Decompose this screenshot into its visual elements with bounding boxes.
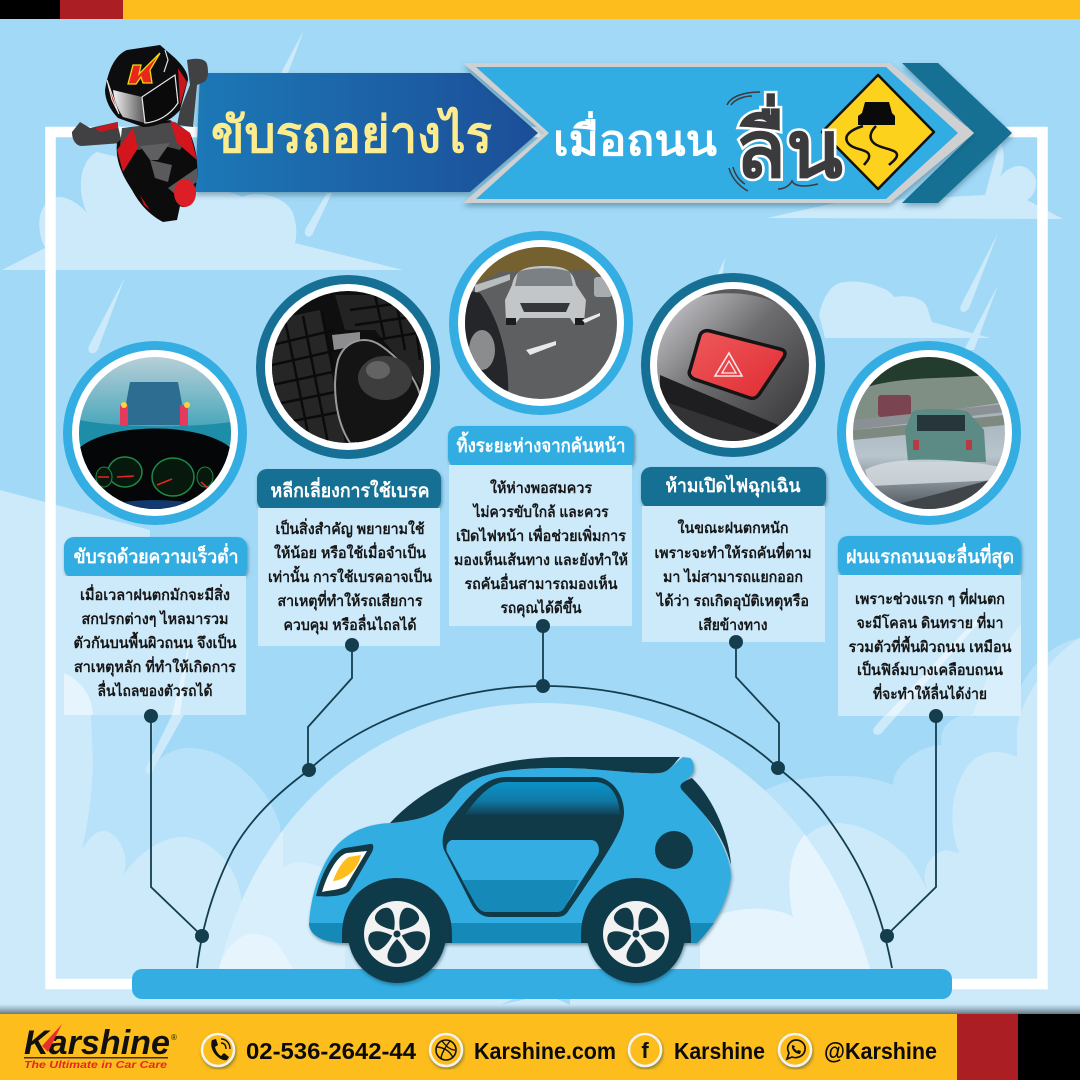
text block bbox=[838, 575, 1021, 735]
left arm bbox=[72, 122, 122, 146]
heading bbox=[448, 426, 634, 467]
rain streak lower left bbox=[146, 715, 184, 774]
helmet K logo bbox=[128, 53, 160, 84]
helmet bbox=[105, 45, 188, 127]
text block: มา ไม่สามารถแยกออก bbox=[663, 567, 803, 586]
text block: เพราะจะทำให้รถคันที่ตาม bbox=[654, 542, 812, 562]
photo: cars on road bbox=[449, 231, 633, 415]
heading bbox=[641, 467, 826, 508]
heading: ขับรถด้วยความเร็วต่ำ bbox=[74, 543, 238, 568]
boot bbox=[174, 179, 196, 207]
car front wheel bbox=[342, 878, 452, 983]
heading: ทิ้งระยะห่างจากคันหน้า bbox=[456, 431, 626, 457]
icon: motion marks bbox=[727, 92, 818, 191]
panel: first rain bbox=[837, 341, 1021, 735]
dome behind car bbox=[215, 703, 885, 969]
icon: facebook bbox=[629, 1034, 661, 1066]
text block: ไม่ควรขับใกล้ และควร bbox=[472, 502, 609, 521]
photo: car in road spray bbox=[837, 341, 1021, 525]
car body bbox=[309, 757, 731, 943]
car illustration bbox=[309, 757, 731, 983]
text block bbox=[64, 576, 246, 715]
top colour bar bbox=[0, 0, 1080, 19]
car rear wheel bbox=[581, 878, 691, 983]
road bar bbox=[132, 969, 952, 999]
text block: จะมีโคลน ดินทราย ที่มา bbox=[856, 612, 1004, 632]
text block: ในขณะฝนตกหนัก bbox=[678, 519, 788, 537]
heading: ห้ามเปิดไฟฉุกเฉิน bbox=[666, 474, 801, 498]
social handle: @Karshine bbox=[824, 1038, 937, 1064]
panel: no hazard lights bbox=[641, 273, 826, 642]
arrow: right light-blue banner bbox=[463, 63, 974, 203]
text block: เพราะช่วงแรก ๆ ที่ฝนตก bbox=[855, 588, 1005, 608]
white frame bbox=[50, 132, 1042, 984]
logo: Karshine bbox=[24, 1024, 170, 1062]
text block: ลื่นไถลของตัวรถได้ bbox=[98, 680, 212, 700]
text block: ควบคุม หรือลื่นไถลได้ bbox=[284, 614, 416, 635]
text block: รวมตัวที่พื้นผิวถนน เหมือน bbox=[848, 635, 1012, 656]
car fuel cap bbox=[655, 831, 693, 869]
arrow: dark teal chevron bbox=[902, 63, 1012, 203]
facebook name: Karshine bbox=[674, 1038, 765, 1064]
text block: เปิดไฟหน้า เพื่อช่วยเพิ่มการ bbox=[456, 525, 627, 545]
text block: สาเหตุหลัก ที่ทำให้เกิดการ bbox=[74, 656, 237, 677]
panel: avoid braking bbox=[256, 275, 441, 646]
text block bbox=[642, 506, 825, 642]
phone number: 02-536-2642-44 bbox=[246, 1038, 416, 1064]
title: how to drive: ขับรถอย่างไร bbox=[211, 106, 492, 163]
text block: เป็นสิ่งสำคัญ พยายามใช้ bbox=[276, 518, 424, 538]
text block: ตัวกันบนพื้นผิวถนน จึงเป็น bbox=[74, 631, 237, 652]
icon: web bbox=[430, 1034, 462, 1066]
text block: ให้ห่างพอสมควร bbox=[490, 479, 593, 497]
title banner bbox=[195, 63, 1012, 203]
icon: whatsapp bbox=[779, 1034, 811, 1066]
text block: เมื่อเวลาฝนตกมักจะมีสิ่ง bbox=[80, 584, 230, 604]
text block: รถคุณได้ดีขึ้น bbox=[500, 596, 582, 618]
text block: สกปรกต่างๆ ไหลมารวม bbox=[82, 609, 228, 628]
photo: hazard button bbox=[641, 273, 825, 457]
text block: ให้น้อย หรือใช้เมื่อจำเป็น bbox=[274, 542, 427, 562]
text block: ที่จะทำให้ลื่นได้ง่าย bbox=[873, 683, 987, 703]
icon: facebook: f bbox=[641, 1038, 649, 1063]
connector arc bbox=[197, 686, 892, 968]
panel: keep distance bbox=[448, 231, 634, 626]
mascot bbox=[72, 45, 208, 222]
heading bbox=[64, 537, 247, 578]
photo: foot on brake pedal bbox=[256, 275, 440, 459]
text block bbox=[449, 465, 632, 626]
connector lines bbox=[151, 626, 936, 968]
text block: เสียข้างทาง bbox=[698, 617, 768, 634]
body bbox=[117, 120, 197, 222]
text block: มองเห็นเส้นทาง และยังทำให้ bbox=[454, 550, 628, 569]
car headlight bbox=[316, 844, 373, 896]
heading: ฝนแรกถนนจะลื่นที่สุด bbox=[846, 543, 1014, 569]
connector dots bbox=[144, 619, 943, 943]
panel: low speed bbox=[63, 341, 247, 715]
text block: สาเหตุที่ทำให้รถเสียการ bbox=[278, 590, 423, 611]
title: slippery: ลื่น bbox=[735, 93, 843, 194]
heading bbox=[838, 536, 1021, 577]
heading: หลีกเลี่ยงการใช้เบรค bbox=[270, 477, 430, 502]
car roof bbox=[390, 757, 680, 823]
icon: slippery road sign bbox=[822, 75, 934, 189]
website: Karshine.com bbox=[474, 1038, 616, 1064]
car door and window bbox=[443, 777, 624, 917]
photo: windscreen in rain bbox=[63, 341, 247, 525]
text block: ได้ว่า รถเกิดอุบัติเหตุหรือ bbox=[655, 591, 809, 611]
heading bbox=[257, 469, 441, 510]
icon: phone bbox=[202, 1034, 234, 1066]
title: when the road: เมื่อถนน bbox=[553, 111, 717, 164]
text block: เป็นฟิล์มบางเคลือบถนน bbox=[857, 660, 1004, 679]
car lower trim bbox=[309, 923, 714, 943]
text block: รถคันอื่นสามารถมองเห็น bbox=[464, 573, 618, 593]
logo: ® bbox=[171, 1033, 177, 1042]
arrow: left blue banner bbox=[195, 73, 538, 192]
text block bbox=[258, 508, 440, 646]
right arm bbox=[177, 59, 208, 127]
rain streak lower right bbox=[873, 716, 896, 735]
logo: The Ultimate in Car Care bbox=[24, 1059, 167, 1071]
car rear panel bbox=[680, 778, 731, 865]
footer bbox=[0, 1004, 1080, 1080]
text block: เท่านั้น การใช้เบรคอาจเป็น bbox=[268, 565, 433, 586]
